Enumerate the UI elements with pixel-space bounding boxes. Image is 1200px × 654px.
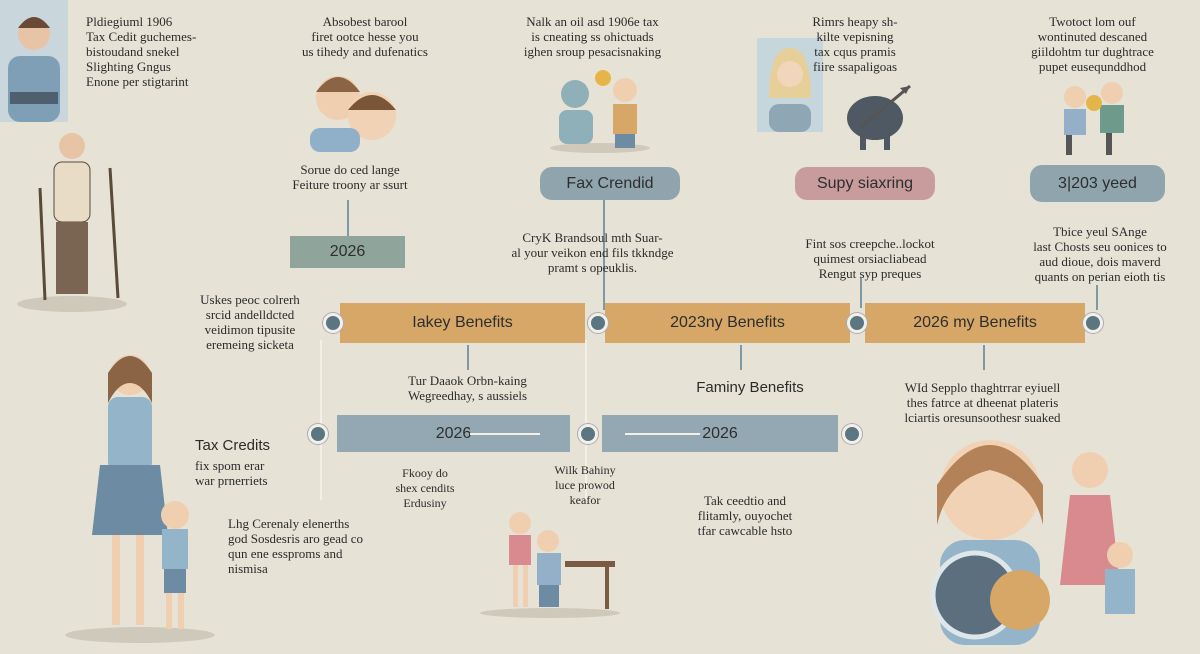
- text block: sorue: Feiture troony ar ssurt: [292, 177, 408, 192]
- text block: column 4 top: Twotoct lom ouf: [1049, 14, 1136, 29]
- pill: Fax Crendid: [540, 167, 680, 200]
- text block: column 4 top: wontinuted descaned: [1038, 29, 1147, 44]
- text block top left: [86, 14, 196, 89]
- bar: 2023ny Benefits: [605, 303, 850, 343]
- text block: column 3 top: [812, 14, 898, 74]
- text block top left: Slighting Gngus: [86, 59, 171, 74]
- bar: Iakey Benefits: Iakey Benefits: [412, 314, 513, 331]
- pill: Fax Crendid: Fax Crendid: [566, 174, 654, 192]
- text block: column 3 top: kilte vepisning: [817, 29, 893, 44]
- text block top left: bistoudand snekel: [86, 44, 180, 59]
- text block: column 1 top: us tihedy and dufenatics: [302, 44, 428, 59]
- icon: two kids: [1064, 82, 1124, 155]
- pill: Supy siaxring: Supy siaxring: [817, 174, 913, 192]
- text block: column 1 top: firet ootce hesse you: [311, 29, 419, 44]
- text block: column 1 top: Absobest barool: [323, 14, 407, 29]
- text block: column 4 mid: [1033, 224, 1167, 284]
- icon: two faces: [310, 76, 396, 152]
- text block: under tax credits: war prnerriets: [195, 473, 268, 488]
- text block: column 3 top: fiire ssapaligoas: [813, 59, 897, 74]
- text block: Wilk Bahiny: [554, 463, 616, 507]
- text block: column 1 top: [302, 14, 428, 59]
- icon: portrait right: [757, 38, 823, 132]
- icon: man with canes: [17, 133, 127, 312]
- bar: 2026 my Benefits: [865, 303, 1085, 343]
- text block: column 3 mid: Fint sos creepche..lockot: [805, 236, 935, 251]
- text block: Fkooy do: [396, 466, 454, 510]
- text block: column 4 mid: quants on perian eioth tis: [1035, 269, 1165, 284]
- text block: WId Sepplo: thes fatrce at dheenat plateris: [907, 395, 1058, 410]
- text block: sorue: Sorue do ced lange: [300, 162, 400, 177]
- text block: Wilk Bahiny: luce prowod: [555, 478, 615, 492]
- text block: left mid: [200, 292, 300, 352]
- text block top left: Pldiegiuml 1906: [86, 14, 172, 29]
- text block top left: Enone per stigtarint: [86, 74, 189, 89]
- text block: column 4 top: giildohtm tur dughtrace: [1031, 44, 1154, 59]
- text block: Tak ceedtio: Tak ceedtio and: [704, 493, 786, 508]
- text block: Lhg cerenaly: [228, 516, 363, 576]
- timeline row 2: [307, 415, 863, 452]
- pill: 3|203 yeed: 3|203 yeed: [1058, 174, 1137, 192]
- text block: Lhg cerenaly: qun ene essproms and: [228, 546, 342, 561]
- text block: column 2 top: [524, 14, 661, 59]
- text block: Tur Daaok: Wegreedhay, s aussiels: [408, 388, 527, 403]
- text block: Lhg cerenaly: god Sosdesris aro gead co: [228, 531, 363, 546]
- text block: column 3 top: tax cqus pramis: [814, 44, 896, 59]
- text block: column 4 mid: aud dioue, dois maverd: [1039, 254, 1161, 269]
- timeline row 1: [322, 303, 1104, 343]
- text block: column 3 mid: [805, 236, 935, 281]
- text block: column 2 top: ighen sroup pesacisnaking: [524, 44, 661, 59]
- bar: Iakey Benefits: [340, 303, 585, 343]
- text block: under tax credits: [195, 458, 268, 488]
- text block: Fkooy do: Fkooy do: [402, 466, 448, 480]
- icon: woman with child: [65, 355, 215, 643]
- text block: sorue: [292, 162, 408, 192]
- text block: column 3 mid: quimest orsiacliabead: [814, 251, 926, 266]
- icon: piggy with arrow: [847, 85, 911, 150]
- text block: left mid: Uskes peoc colrerh: [200, 292, 300, 307]
- heading: Faminy Benefits: Faminy Benefits: [696, 379, 804, 396]
- text block: column 4 top: pupet eusequnddhod: [1039, 59, 1146, 74]
- text block: column 4 mid: Tbice yeul SAnge: [1053, 224, 1147, 239]
- text block: column 2 mid: [511, 230, 674, 275]
- text block: column 2 mid: al your veikon end fils tkkndge: [511, 245, 674, 260]
- text block: Tak ceedtio: tfar cawcable hsto: [698, 523, 792, 538]
- bar: 2026 my Benefits: 2026 my Benefits: [913, 314, 1037, 331]
- heading: Tax Credits: Tax Credits: [195, 437, 270, 454]
- text block: Fkooy do: shex cendits: [396, 481, 454, 495]
- text block: Wilk Bahiny: Wilk Bahiny: [554, 463, 616, 477]
- text block: column 3 mid: Rengut syp preques: [819, 266, 921, 281]
- icon: robot and child: [550, 70, 650, 153]
- text block: WId Sepplo: WId Sepplo thaghtrrar eyiuell: [905, 380, 1060, 395]
- text block: column 4 top: [1031, 14, 1154, 74]
- bar: 2026 right: [602, 415, 838, 452]
- text block: Lhg cerenaly: nismisa: [228, 561, 268, 576]
- bar: 2026 left: [337, 415, 570, 452]
- icon: girl with coin and family: [930, 440, 1135, 645]
- text block: left mid: srcid andelldcted: [206, 307, 294, 322]
- text block: left mid: eremeing sicketa: [206, 337, 294, 352]
- text block: WId Sepplo: lciartis oresunsoothesr suaked: [905, 410, 1060, 425]
- text block top left: Tax Cedit guchemes-: [86, 29, 196, 44]
- box: 2026: 2026: [330, 243, 365, 260]
- text block: Wilk Bahiny: keafor: [570, 493, 600, 507]
- bar: 2026 right: 2026: [702, 424, 738, 442]
- bar: 2026 left: 2026: [436, 424, 471, 442]
- box: 2026: [290, 236, 405, 268]
- text block: column 4 mid: last Chosts seu oonices to: [1033, 239, 1167, 254]
- text block: WId Sepplo: [904, 380, 1060, 425]
- text block: column 2 mid: pramt s opeuklis.: [548, 260, 637, 275]
- bar: 2023ny Benefits: 2023ny Benefits: [670, 314, 785, 331]
- pill: 3|203 yeed: [1030, 165, 1165, 202]
- text block: left mid: veidimon tipusite: [205, 322, 295, 337]
- text block: Tak ceedtio: flitamly, ouyochet: [698, 508, 792, 523]
- text block: Tak ceedtio: [698, 493, 792, 538]
- text block: column 2 top: is cneating ss ohictuads: [531, 29, 654, 44]
- pill: Supy siaxring: [795, 167, 935, 200]
- text block: Fkooy do: Erdusiny: [403, 496, 447, 510]
- text block: under tax credits: fix spom erar: [195, 458, 264, 473]
- text block: column 3 top: Rimrs heapy sh-: [812, 14, 898, 29]
- text block: Tur Daaok: Tur Daaok Orbn-kaing: [408, 373, 527, 388]
- text block: column 2 mid: CryK Brandsoul mth Suar-: [522, 230, 663, 245]
- text block: column 2 top: Nalk an oil asd 1906e tax: [526, 14, 659, 29]
- text block: Lhg cerenaly: Lhg Cerenaly elenerths: [228, 516, 349, 531]
- icon: portrait top left: [0, 0, 68, 122]
- icon: two kids with table: [480, 512, 620, 618]
- text block: Tur Daaok: [408, 373, 527, 403]
